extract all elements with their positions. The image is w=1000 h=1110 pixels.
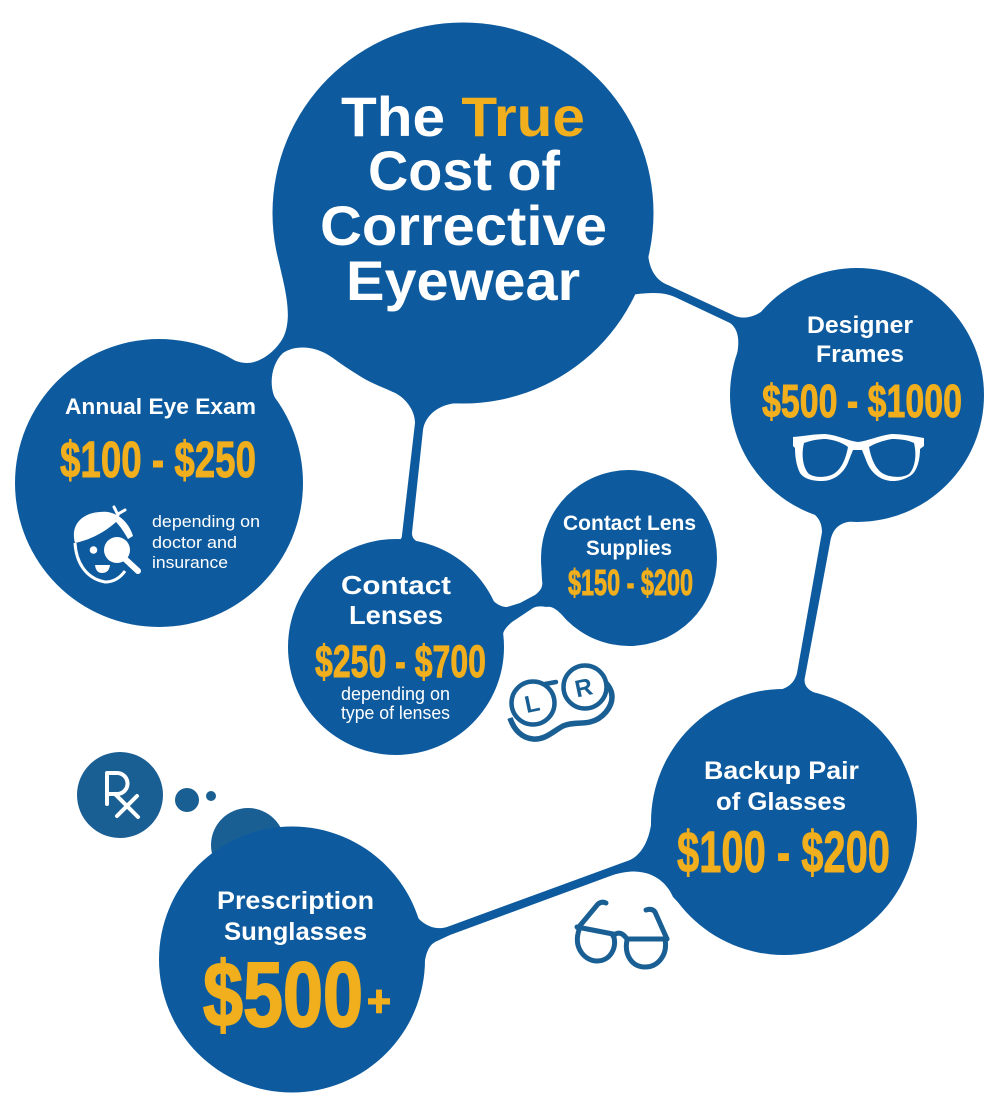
note: lenses: depending on bbox=[341, 684, 450, 704]
panel: title circle bbox=[272, 22, 654, 404]
heading: designer frames: Frames bbox=[816, 341, 904, 368]
panel: annual eye exam bbox=[15, 339, 303, 627]
icon: contact lens case: L bbox=[522, 690, 542, 719]
icon: contact lens case bbox=[510, 666, 612, 739]
price: exam: $100 - $250 bbox=[60, 431, 256, 488]
title bbox=[320, 85, 607, 312]
panel: designer frames bbox=[730, 268, 984, 522]
icon: white glasses bbox=[793, 434, 924, 481]
note: lenses bbox=[341, 684, 450, 723]
heading: contact lenses bbox=[341, 570, 451, 630]
heading: prescription sunglasses: Sunglasses bbox=[224, 918, 367, 946]
price: supplies: $150 - $200 bbox=[568, 562, 693, 603]
panel: contact lens supplies bbox=[541, 470, 717, 646]
heading: annual eye exam: Annual Eye Exam bbox=[65, 394, 256, 419]
heading: contact lenses: Lenses bbox=[349, 600, 443, 630]
heading: contact lenses: Contact bbox=[341, 570, 451, 600]
title: Eyewear bbox=[346, 249, 580, 312]
back circle behind sunglasses bbox=[211, 808, 285, 882]
heading: prescription sunglasses bbox=[217, 887, 374, 946]
panel: contact lenses bbox=[288, 539, 504, 755]
price: backup: $100 - $200 bbox=[677, 820, 890, 885]
title: The True bbox=[341, 85, 585, 148]
heading: supplies bbox=[563, 512, 696, 560]
title: Corrective bbox=[320, 194, 607, 257]
note: exam: depending on bbox=[152, 512, 260, 531]
note: lenses: type of lenses bbox=[341, 703, 450, 723]
icon: face with magnifier bbox=[74, 507, 138, 582]
heading: designer frames: Designer bbox=[807, 312, 913, 339]
heading: designer frames bbox=[807, 312, 913, 368]
note: exam: doctor and bbox=[152, 533, 237, 552]
title: Cost of bbox=[368, 139, 560, 202]
price: sunglasses: $500 bbox=[203, 944, 363, 1046]
heading: prescription sunglasses: Prescription bbox=[217, 887, 374, 915]
heading: backup pair: of Glasses bbox=[716, 788, 846, 816]
heading: supplies: Contact Lens bbox=[563, 512, 696, 535]
connectors between circles bbox=[200, 250, 860, 960]
heading: supplies: Supplies bbox=[586, 537, 672, 560]
note: exam bbox=[152, 512, 260, 572]
panel: prescription sunglasses bbox=[159, 826, 425, 1092]
price: sunglasses: + bbox=[367, 977, 391, 1026]
heading: backup pair bbox=[704, 757, 859, 816]
icon: contact lens case: R bbox=[572, 673, 595, 703]
icon: folded glasses bbox=[577, 902, 667, 967]
note: exam: insurance bbox=[152, 553, 228, 572]
panel: backup pair of glasses bbox=[651, 689, 917, 955]
price: lenses: $250 - $700 bbox=[315, 636, 486, 687]
icon: rx bubble bbox=[77, 752, 216, 838]
heading: backup pair: Backup Pair bbox=[704, 757, 859, 785]
